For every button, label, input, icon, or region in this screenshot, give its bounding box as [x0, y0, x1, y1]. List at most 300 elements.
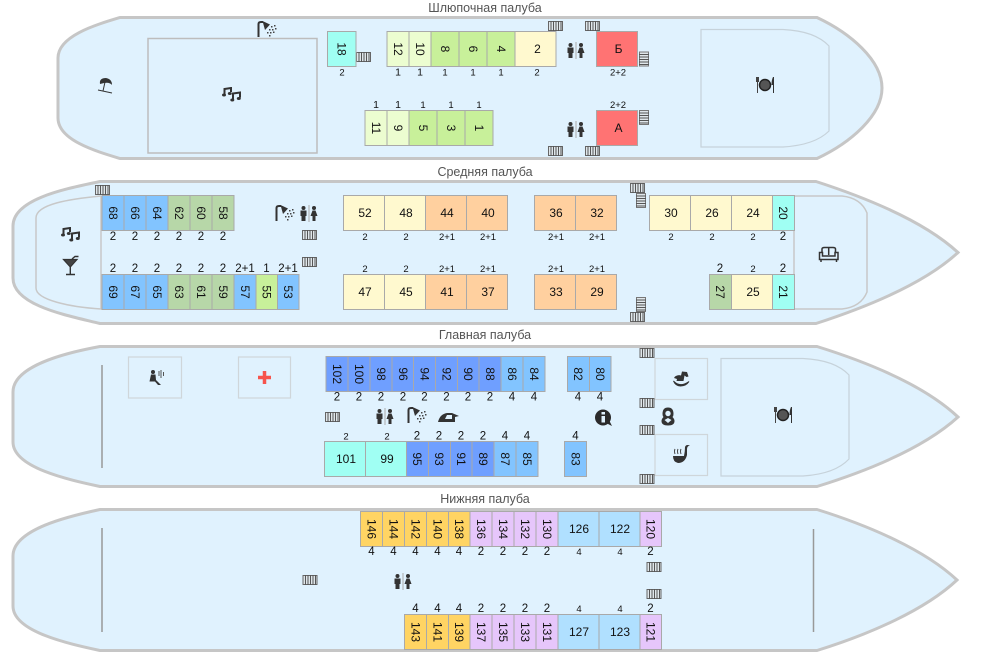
cabin 86	[501, 356, 523, 404]
room: playroom	[655, 358, 708, 400]
hull: lower deck	[13, 510, 957, 650]
cabin 141: 141	[430, 622, 444, 642]
cabin 100: 100	[352, 364, 366, 384]
cabin 4: 1	[498, 68, 504, 78]
cabin 18: 18	[334, 42, 348, 56]
cabin 5: 1	[420, 100, 426, 111]
cabin 66: 2	[132, 231, 138, 243]
cabin 134: 134	[496, 519, 510, 539]
cabin 3: 1	[448, 100, 454, 111]
cabin 63: 2	[176, 263, 182, 275]
cabin 59: 2	[220, 263, 226, 275]
cabin 44: 44	[440, 206, 454, 220]
cabin 91: 2	[458, 430, 464, 442]
cabin 29: 29	[590, 285, 604, 299]
cabin 96: 2	[400, 392, 406, 404]
cabin 146	[360, 512, 382, 558]
cabin 143: 4	[412, 603, 419, 615]
suite Б: Б	[615, 42, 623, 56]
cabin 100: 2	[356, 392, 362, 404]
icon: iron	[438, 413, 459, 422]
cabin 83: 4	[572, 430, 579, 442]
cabin 63: 63	[172, 285, 186, 299]
cabin 95: 95	[410, 452, 424, 466]
aft divider	[101, 365, 103, 468]
suite А: 2+2	[610, 100, 626, 111]
cabin 138	[448, 512, 470, 558]
cabin 84: 4	[531, 392, 538, 404]
cabin 3	[437, 100, 465, 146]
cabin 99	[366, 432, 406, 476]
cabin 48	[384, 196, 426, 243]
suite А: А	[614, 121, 623, 135]
cabin 61	[190, 263, 212, 310]
cabin 67: 67	[128, 285, 142, 299]
cabin 120: 120	[644, 519, 658, 539]
panel: main deck	[13, 346, 958, 486]
cabin 11	[365, 99, 387, 146]
cabin 93: 93	[432, 452, 446, 466]
cabin 80: 80	[593, 367, 607, 381]
cabin 101	[324, 432, 366, 476]
cabin 131: 2	[544, 603, 550, 615]
cabin 62: 62	[172, 206, 186, 220]
cabin 101: 2	[343, 432, 349, 442]
cabin 64: 2	[154, 231, 160, 243]
cabin 36: 2+1	[548, 232, 564, 243]
cabin 40: 2+1	[480, 232, 496, 243]
cabin 90: 90	[461, 367, 475, 381]
cabin 24: 2	[750, 232, 756, 243]
cabin 144	[382, 512, 404, 558]
cabin 65: 2	[154, 263, 160, 275]
cabin 131	[536, 603, 558, 650]
stairs	[356, 21, 649, 156]
icon: restroom	[394, 573, 412, 590]
room: medical	[238, 357, 290, 398]
cabin 132: 132	[518, 519, 532, 539]
title: boat deck: Шлюпочная палуба	[428, 1, 542, 15]
cabin 88: 2	[487, 392, 493, 404]
cabin 8: 8	[438, 46, 452, 53]
panel: middle deck	[13, 182, 958, 324]
panel: lower deck	[13, 510, 957, 650]
cabin 6: 6	[466, 46, 480, 53]
room: kitchen	[655, 434, 708, 476]
panel: boat deck	[58, 18, 882, 158]
icon: sofa	[820, 248, 838, 262]
cabin 11: 1	[373, 99, 379, 111]
cabin 96	[392, 356, 414, 404]
cabin 57: 57	[238, 285, 252, 299]
icon: music notes	[61, 228, 80, 242]
cabin 87: 87	[498, 452, 512, 466]
cabin 96: 96	[396, 367, 410, 381]
cabin 37	[466, 264, 508, 310]
cabin 141: 4	[434, 603, 441, 615]
cabin 26	[690, 196, 732, 243]
cabin 100	[348, 356, 370, 404]
cabin 99: 99	[380, 452, 394, 466]
cabin 1: 1	[472, 125, 486, 132]
cabin 53	[278, 263, 299, 310]
cabin 2: 2	[534, 68, 540, 78]
cabin 27: 2	[717, 263, 723, 275]
cabin 85: 85	[520, 452, 534, 466]
cabin 60: 60	[194, 206, 208, 220]
cabin 127: 4	[576, 604, 582, 615]
cabin 66: 66	[128, 206, 142, 220]
cabin 20: 20	[776, 206, 790, 220]
cabin 82: 4	[575, 392, 582, 404]
cabin 95	[406, 430, 428, 476]
cabin 1	[465, 100, 493, 146]
cabin 130: 130	[540, 519, 554, 539]
cabin 122: 4	[617, 547, 623, 558]
cabin 32	[576, 196, 616, 243]
cabin 68	[102, 196, 124, 243]
icon: nesting doll	[662, 408, 674, 426]
icon: music notes	[222, 88, 241, 102]
cabin 48: 2	[403, 232, 409, 243]
cabin 68: 2	[110, 231, 116, 243]
suite Б	[596, 32, 638, 78]
cabin 93	[428, 430, 450, 476]
cabin 6: 1	[470, 68, 476, 78]
cabin 8	[431, 32, 459, 78]
cabin 123: 4	[617, 604, 623, 615]
cabin 60	[190, 196, 212, 243]
cabin 9	[387, 99, 409, 146]
cabin 140	[426, 512, 448, 558]
cabin 37: 37	[481, 285, 495, 299]
cabin 62: 2	[176, 231, 182, 243]
cabin 58	[212, 196, 234, 243]
cabin 136: 136	[474, 519, 488, 539]
cabin 86: 86	[505, 367, 519, 381]
cabin 53: 2+1	[278, 263, 298, 275]
cabin 121	[640, 603, 662, 650]
cabin 21: 2	[780, 263, 786, 275]
cabin 91: 91	[454, 452, 468, 466]
cabin 92: 92	[440, 367, 454, 381]
cabin 65	[146, 263, 168, 310]
cabin 36: 36	[549, 206, 563, 220]
cabin 59: 59	[216, 285, 230, 299]
cabin 5	[409, 100, 437, 146]
cabin 40	[466, 196, 508, 243]
stairs	[303, 562, 661, 599]
cabin 25: 2	[750, 264, 756, 275]
cabin 138: 4	[456, 546, 463, 558]
restaurant room	[721, 358, 849, 476]
cabin 120: 2	[647, 546, 654, 558]
cabin 58: 58	[216, 206, 230, 220]
cabin 61: 2	[198, 263, 204, 275]
cabin 127	[558, 604, 599, 650]
cabin 132: 2	[522, 546, 528, 558]
cabin 20	[772, 196, 794, 243]
cabin 12: 1	[395, 66, 401, 78]
cabin 94: 2	[421, 392, 428, 404]
cabin 55	[256, 263, 278, 310]
cabin 57: 2+1	[235, 263, 255, 275]
cabin 37: 2+1	[480, 264, 496, 275]
cabin 126: 4	[576, 547, 582, 558]
cabin 45	[384, 264, 426, 310]
cabin 94: 94	[418, 367, 432, 381]
cabin 126: 126	[569, 522, 589, 536]
cabin 18: 2	[339, 68, 345, 78]
cabin 64: 64	[150, 206, 164, 220]
cabin 65: 65	[150, 285, 164, 299]
cabin 9: 1	[395, 99, 401, 111]
cabin 27: 27	[713, 285, 727, 299]
cabin 137: 137	[474, 622, 488, 642]
icon: restaurant plate	[774, 407, 792, 423]
cabin 1: 1	[476, 100, 482, 111]
cabin 98: 98	[374, 367, 388, 381]
cabin 44	[426, 196, 466, 243]
cabin 89: 2	[480, 430, 486, 442]
cabin 29: 2+1	[589, 264, 605, 275]
cabin 92	[436, 356, 458, 404]
cabin 11: 11	[369, 122, 383, 135]
cabin 146: 146	[364, 519, 378, 539]
cabin 137	[470, 603, 492, 650]
cabin 52: 52	[358, 206, 372, 220]
cabin 131: 131	[540, 622, 554, 642]
cabin 8: 1	[442, 68, 448, 78]
restaurant room	[701, 30, 829, 147]
cabin 135	[492, 603, 514, 650]
icon: shower	[276, 205, 294, 221]
title: lower deck: Нижняя палуба	[440, 492, 530, 506]
cabin 21	[772, 263, 794, 310]
cabin 134: 2	[500, 546, 506, 558]
cabin 2	[515, 32, 556, 78]
cabin 142	[404, 512, 426, 558]
cabin 95: 2	[414, 430, 420, 442]
cabin 85: 4	[524, 430, 531, 442]
cabin 44: 2+1	[439, 232, 455, 243]
cabin 123: 123	[610, 625, 630, 639]
suite Б: 2+2	[610, 68, 626, 78]
hull: main deck	[13, 346, 958, 486]
title: middle deck: Средняя палуба	[437, 165, 533, 179]
cabin 52	[344, 196, 384, 243]
cabin 10: 10	[413, 42, 427, 56]
cabin 146: 4	[368, 546, 375, 558]
cabin 122: 122	[610, 522, 630, 536]
icon: restroom lower	[568, 121, 584, 138]
cabin 68: 68	[106, 206, 120, 220]
cabin 55: 1	[263, 263, 270, 275]
cabin 18	[328, 32, 356, 78]
cabin 63	[168, 263, 190, 310]
cabin 143: 143	[408, 622, 422, 642]
cabin 135: 2	[500, 603, 506, 615]
cabin 33: 33	[549, 285, 563, 299]
cabin 10	[409, 32, 431, 78]
cabin 84: 84	[527, 367, 541, 381]
cabin 89: 89	[476, 452, 490, 466]
cabin 82: 82	[571, 367, 585, 381]
cabin 48: 48	[399, 206, 413, 220]
cabin 92: 2	[443, 392, 450, 404]
cabin 55: 55	[260, 285, 274, 299]
cabin 88: 88	[483, 367, 497, 381]
cabin 89	[472, 430, 494, 476]
icon: beach umbrella	[98, 78, 112, 93]
cabin 133	[514, 603, 536, 650]
cabin 144: 144	[386, 519, 400, 539]
icon: information	[595, 410, 612, 426]
cabin 136	[470, 512, 492, 558]
cabin 98	[370, 356, 392, 404]
icon: restroom upper	[568, 42, 584, 59]
icon: shower	[258, 21, 276, 37]
cabin 87	[494, 430, 516, 476]
cabin 9: 9	[391, 125, 405, 132]
cabin 59	[212, 263, 234, 310]
lounge aft outline	[36, 196, 101, 309]
cabin 126	[558, 512, 599, 558]
cabin 41: 2+1	[439, 264, 455, 275]
cabin 20: 2	[780, 231, 786, 243]
cabin 82	[568, 356, 590, 404]
cabin 12: 12	[391, 42, 405, 56]
music hall room	[148, 38, 317, 153]
cabin 94	[414, 356, 436, 404]
cabin 102	[326, 356, 348, 404]
cabin 41: 41	[440, 285, 454, 299]
cabin 21: 21	[776, 285, 790, 299]
cabin 61: 61	[194, 285, 208, 299]
cabin 26: 26	[705, 206, 719, 220]
cabin 47: 47	[358, 285, 372, 299]
cabin 139: 139	[452, 622, 466, 642]
cabin 26: 2	[709, 232, 715, 243]
cabin 135: 135	[496, 622, 510, 642]
cabin 88	[479, 356, 501, 404]
cabin 4: 4	[494, 46, 508, 53]
cabin 45: 2	[403, 264, 409, 275]
lounge bow outline	[794, 196, 867, 309]
cabin 69	[102, 263, 124, 310]
cabin 60: 2	[198, 231, 204, 243]
cabin 90: 2	[465, 392, 471, 404]
cabin 101: 101	[336, 452, 356, 466]
cabin 69: 69	[106, 285, 120, 299]
cabin 137: 2	[478, 603, 484, 615]
cabin 10: 1	[417, 66, 423, 78]
cabin 120	[640, 512, 662, 558]
cabin 86: 4	[509, 392, 516, 404]
suite А	[596, 100, 638, 146]
cabin 99: 2	[384, 432, 390, 442]
cabin 87: 4	[502, 430, 509, 442]
cabin 45: 45	[399, 285, 413, 299]
cabin 36	[534, 196, 576, 243]
cabin 127: 127	[569, 625, 589, 639]
cabin 132	[514, 512, 536, 558]
icon: restroom	[376, 408, 394, 425]
cabin 32: 2+1	[589, 232, 605, 243]
cabin 30: 2	[668, 232, 674, 243]
cabin 121: 2	[647, 603, 654, 615]
icon: restroom	[300, 205, 318, 222]
cabin 40: 40	[481, 206, 495, 220]
cabin 121: 121	[644, 622, 658, 642]
cabin 122	[599, 512, 640, 558]
cabin 25: 25	[746, 285, 760, 299]
cabin 142: 142	[408, 519, 422, 539]
cabin 80: 4	[597, 392, 604, 404]
cabin 24: 24	[746, 206, 760, 220]
cabin 3: 3	[444, 125, 458, 132]
icon: restaurant plate	[756, 77, 774, 93]
cabin 83: 83	[568, 452, 582, 466]
cabin 83	[564, 430, 586, 476]
cabin 29	[576, 264, 616, 310]
cabin 130: 2	[544, 546, 550, 558]
cabin 102: 102	[330, 364, 344, 384]
cabin 67	[124, 263, 146, 310]
cabin 84	[523, 356, 545, 404]
cabin 12	[387, 32, 409, 78]
cabin 138: 138	[452, 519, 466, 539]
hull: boat deck	[58, 18, 882, 158]
cabin 6	[459, 32, 487, 78]
cabin 58: 2	[220, 231, 226, 243]
cabin 140: 140	[430, 519, 444, 539]
cabin 5: 5	[416, 125, 430, 132]
cabin 139	[448, 603, 470, 650]
cabin 47	[344, 264, 384, 310]
cabin 136: 2	[478, 546, 484, 558]
cabin 57	[234, 263, 256, 310]
cabin 133: 133	[518, 622, 532, 642]
cabin 62	[168, 196, 190, 243]
icon: cocktail	[64, 256, 78, 274]
cabin 25	[732, 264, 772, 310]
cabin 102: 2	[334, 392, 340, 404]
cabin 67: 2	[132, 263, 138, 275]
cabin 144: 4	[390, 546, 397, 558]
cabin 134	[492, 512, 514, 558]
cabin 140: 4	[434, 546, 441, 558]
cabin 130	[536, 512, 558, 558]
cabin 4	[487, 32, 515, 78]
cabin 27	[710, 263, 732, 310]
cabin 47: 2	[362, 264, 368, 275]
bow divider	[812, 529, 814, 632]
cabin 52: 2	[362, 232, 368, 243]
cabin 98: 2	[378, 392, 384, 404]
room: massage	[128, 357, 182, 398]
cabin 41	[426, 264, 466, 310]
cabin 123	[599, 604, 640, 650]
cabin 90	[458, 356, 479, 404]
cabin 33	[534, 264, 576, 310]
cabin 32: 32	[590, 206, 604, 220]
title: main deck: Главная палуба	[439, 328, 531, 342]
cabin 24	[732, 196, 772, 243]
cabin 91	[450, 430, 472, 476]
cabin 30: 30	[664, 206, 678, 220]
cabin 133: 2	[522, 603, 528, 615]
